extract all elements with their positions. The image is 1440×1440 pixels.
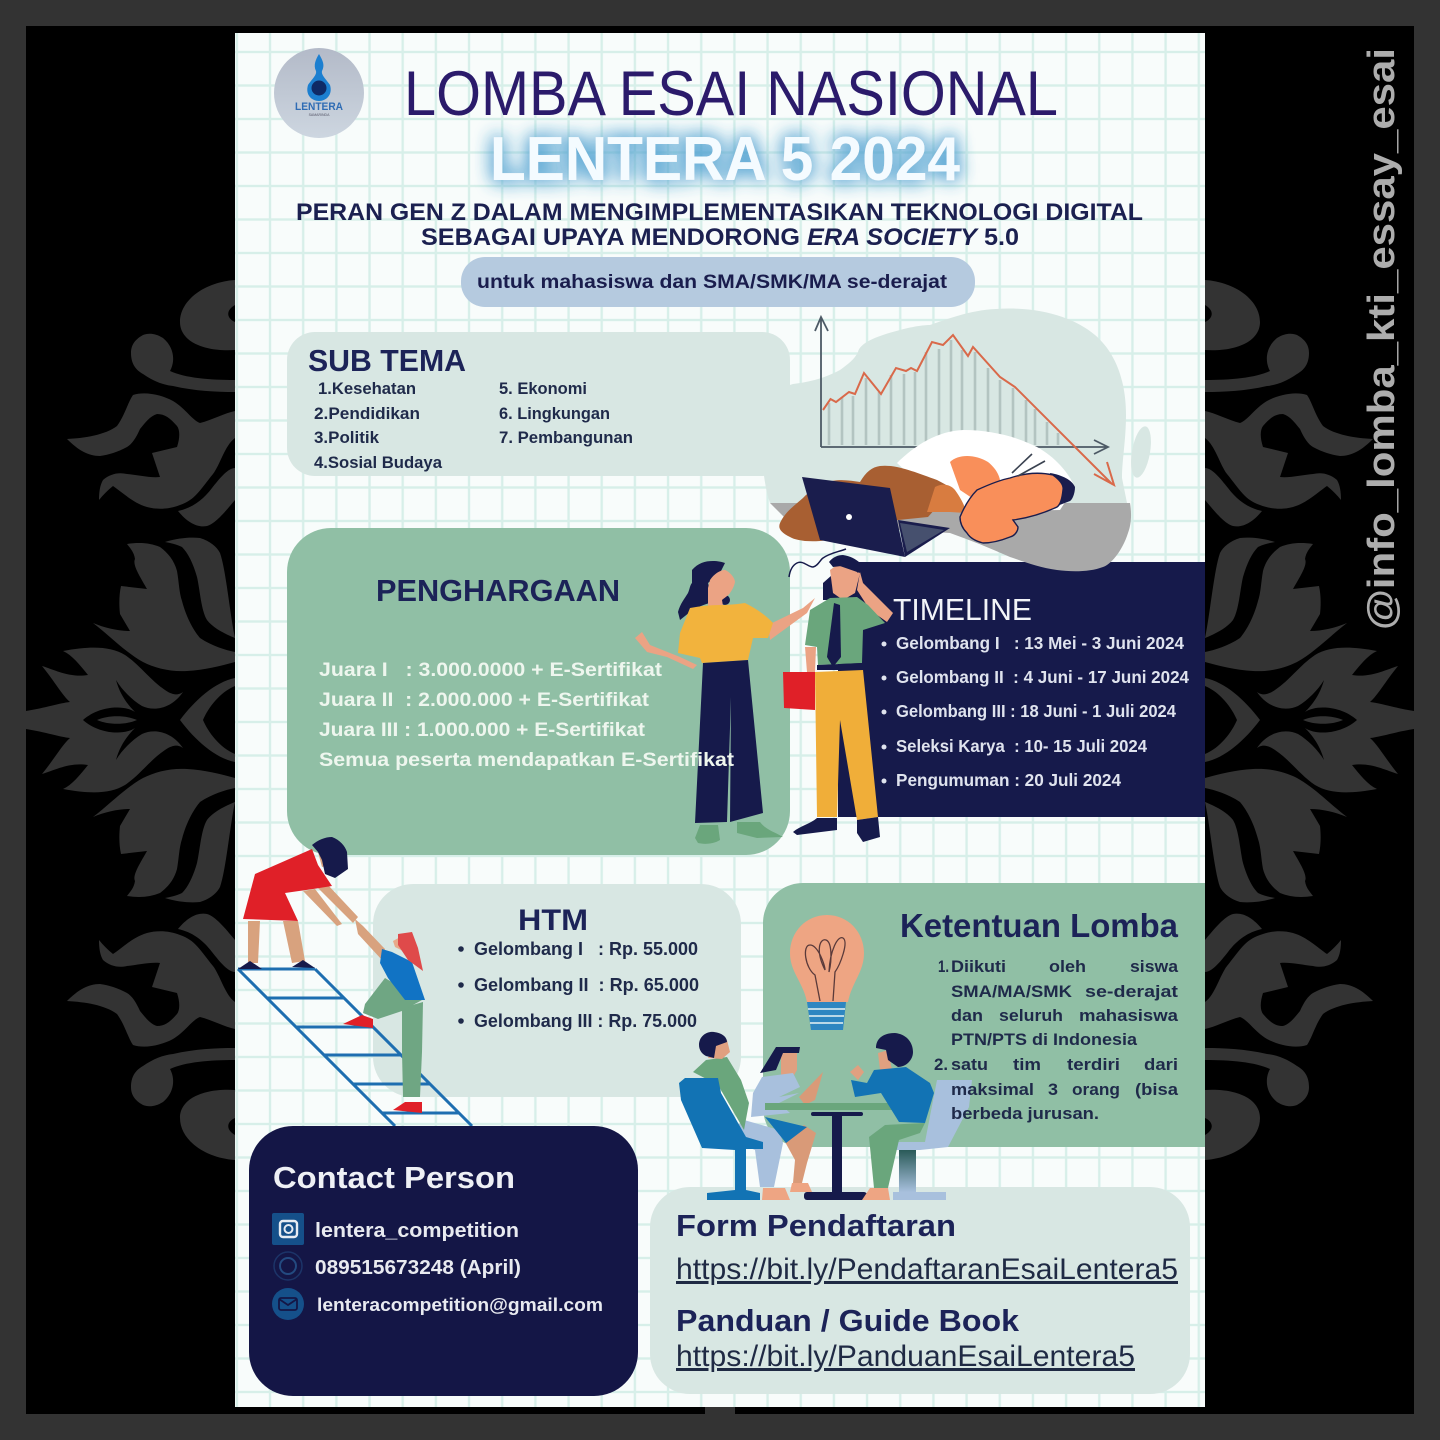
text: competition rules: maksimal [951,1080,1034,1099]
logo: Lentera [274,48,364,138]
heading: form pendaftaran: Form Pendaftaran [676,1208,956,1243]
list: htm prices: Gelombang II : Rp. 65.000 [474,975,699,995]
right person [850,1033,934,1200]
list: sub tema right column: 7. Pembangunan [499,428,633,447]
list: prizes: Semua peserta mendapatkan E-Sertifikat [319,749,735,771]
text: competition rules: dan [951,1006,983,1025]
text: competition rules: satu [951,1055,988,1074]
icon: instagram [272,1213,304,1245]
right chair [892,1080,972,1200]
heading: sub tema: SUB TEMA [308,343,466,378]
theme heading [296,199,1143,251]
list: htm prices: Gelombang I : Rp. 55.000 [474,939,698,959]
list: sub tema left column: 2.Pendidikan [314,404,420,423]
list: timeline dates: Gelombang I : 13 Mei - 3 Juni 2024 [896,633,1184,653]
illustration: ladder and helping figures [238,837,472,1126]
chart: falling trend [815,317,1114,485]
text: competition rules: PTN/PTS di Indonesia [951,1030,1138,1049]
list: prizes: Juara III : 1.000.000 + E-Sertifikat [319,719,646,741]
panel: sub tema [287,332,790,476]
illustration backdrop blob [762,309,1154,503]
heading: timeline: TIMELINE [893,592,1032,627]
list: htm prices [458,939,699,1031]
theme heading: SEBAGAI UPAYA MENDORONG ERA SOCIETY 5.0 [421,224,1019,251]
left chair [679,1078,763,1200]
text: competition rules: siswa [1130,957,1179,976]
text: competition rules [934,957,1179,1123]
text: competition rules: Diikuti [951,957,1006,976]
contact: instagram: lentera_competition [315,1220,519,1242]
heading: htm: HTM [518,904,588,937]
text: competition rules: orang [1072,1080,1120,1099]
poster sheet background [235,33,1205,1407]
icon: email [272,1288,304,1320]
text: competition rules: se-derajat [1085,982,1178,1001]
list: sub tema right column [499,379,633,447]
contact: whatsapp: 089515673248 (April) [315,1257,521,1279]
list: timeline dates [882,633,1189,790]
illustration: tired student on laptop [770,430,1131,571]
panel: ketentuan lomba [763,883,1205,1147]
logo: Lentera: SAMARINDA [309,113,330,117]
icon: whatsapp [274,1252,302,1280]
illustration: team around table [679,1032,972,1200]
middle person [751,1047,823,1192]
audience pill [461,257,975,307]
illustration: man on the phone [783,549,893,842]
icon: light bulb [790,915,864,1030]
illustration: woman talking [635,561,815,844]
text: competition rules: seluruh [999,1006,1063,1025]
list: prizes [319,659,735,771]
list: timeline dates: Seleksi Karya : 10- 15 Juli 2024 [896,736,1147,756]
heading: guide book: Panduan / Guide Book [676,1303,1020,1338]
text: competition rules: (bisa [1135,1080,1179,1099]
left person [693,1032,790,1200]
link: registration: https://bit.ly/PendaftaranEsaiLentera5 [676,1253,1178,1286]
panel: form pendaftaran [650,1187,1190,1394]
heading: contact person: Contact Person [273,1160,515,1195]
text: competition rules: 3 [1048,1080,1058,1099]
list: timeline dates: Gelombang III : 18 Juni - 1 Juli 2024 [896,701,1176,721]
theme heading: PERAN GEN Z DALAM MENGIMPLEMENTASIKAN TEKNOLOGI DIGITAL [296,199,1143,226]
contact: email: lenteracompetition@gmail.com [317,1295,603,1315]
text: competition rules: tim [1013,1055,1041,1074]
text: competition rules: mahasiswa [1079,1006,1179,1025]
text: competition rules: 2. [934,1055,948,1074]
text: competition rules: oleh [1049,957,1086,976]
link: guide book: https://bit.ly/PanduanEsaiLentera5 [676,1340,1135,1373]
text: competition rules: dari [1144,1055,1178,1074]
panel: contact person [249,1126,638,1396]
list: sub tema left column: 3.Politik [314,428,380,447]
list: prizes: Juara I : 3.000.0000 + E-Sertifikat [319,659,663,681]
list: sub tema left column: 4.Sosial Budaya [314,453,443,472]
list: prizes: Juara II : 2.000.000 + E-Sertifikat [319,689,650,711]
list: timeline dates: Pengumuman : 20 Juli 2024 [896,770,1121,790]
list: htm prices: Gelombang III : Rp. 75.000 [474,1011,697,1031]
audience pill: untuk mahasiswa dan SMA/SMK/MA se-derajat [477,272,948,293]
panel: penghargaan [287,528,790,855]
logo: Lentera: LENTERA [295,101,343,113]
subtitle: Lentera 5 2024: LENTERA 5 2024 [490,125,960,194]
text: competition rules: SMA/MA/SMK [951,982,1073,1001]
table [765,1103,895,1200]
list: timeline dates: Gelombang II : 4 Juni - 17 Juni 2024 [896,667,1189,687]
list: sub tema left column [314,379,443,472]
heading: ketentuan lomba: Ketentuan Lomba [900,907,1179,944]
heading: penghargaan: PENGHARGAAN [376,573,620,608]
text: competition rules: berbeda jurusan. [951,1104,1099,1123]
panel: htm [373,884,741,1097]
icon: red book [783,672,815,710]
title: LOMBA ESAI NASIONAL [404,59,1058,129]
text: competition rules: 1. [938,957,949,976]
watermark text: @info_lomba_kti_essay_esai [1361,48,1403,630]
panel: timeline [838,562,1205,817]
list: sub tema right column: 5. Ekonomi [499,379,587,398]
decorative ornament left and right [26,280,1414,1414]
text: competition rules: terdiri [1067,1055,1120,1074]
list: sub tema right column: 6. Lingkungan [499,404,610,423]
list: sub tema left column: 1.Kesehatan [318,379,416,398]
